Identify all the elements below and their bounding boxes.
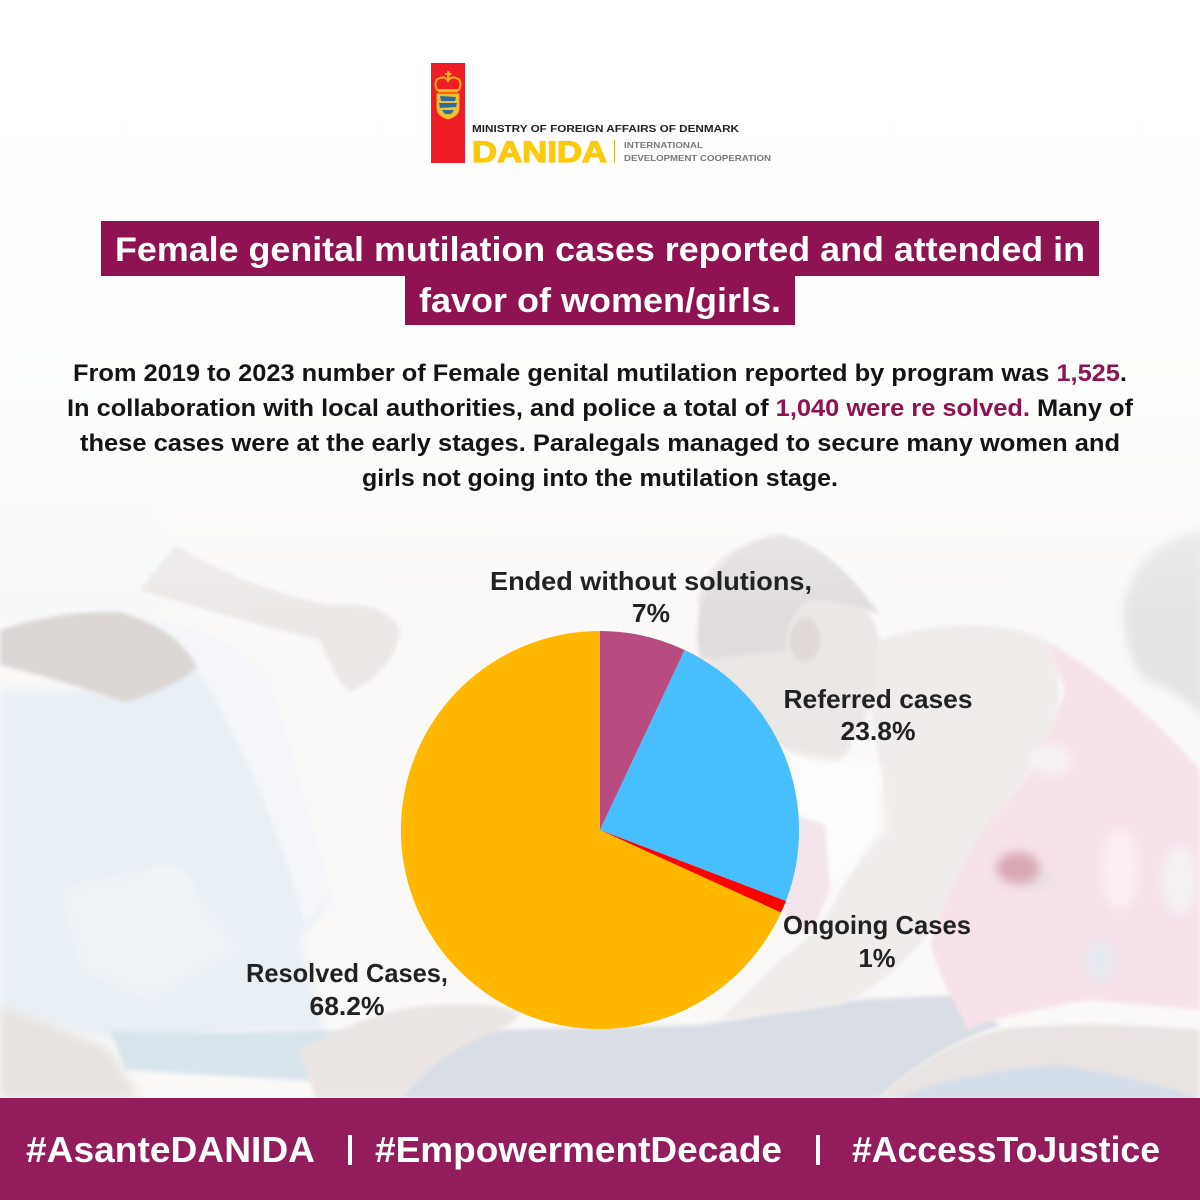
label: ended without solutions: Ended without solutions, xyxy=(490,566,812,596)
slice: ongoing cases 1% xyxy=(600,830,786,912)
logo subtitle: INTERNATIONAL xyxy=(624,140,703,150)
title xyxy=(101,221,1099,325)
intro text block: From 2019 to 2023 number of Female genital mutilation reported by program was 1,525. xyxy=(73,360,1127,387)
footer hashtag band: #AccessToJustice xyxy=(852,1129,1160,1170)
footer hashtag band: #AsanteDANIDA xyxy=(26,1129,315,1170)
slice: resolved cases 68.2% xyxy=(401,631,781,1029)
title: favor of women/girls. xyxy=(419,282,781,320)
logo red banner xyxy=(431,63,465,163)
logo: Danida, Ministry of Foreign Affairs of Denmark xyxy=(431,63,771,169)
intro text block: In collaboration with local authorities, and police a total of 1,040 were re solved. Many of xyxy=(67,395,1134,422)
label: ongoing cases xyxy=(783,910,971,973)
logo crest: crown and shield xyxy=(436,71,460,119)
label: ended without solutions xyxy=(490,566,812,628)
label: resolved cases xyxy=(246,958,448,1021)
footer hashtag band: #EmpowermentDecade xyxy=(375,1129,782,1170)
logo ministry line: MINISTRY OF FOREIGN AFFAIRS OF DENMARK xyxy=(472,123,739,135)
label: referred cases: 23.8% xyxy=(840,716,916,746)
intro text block: these cases were at the early stages. Paralegals managed to secure many women and xyxy=(80,430,1120,457)
slice: referred cases 23.8% xyxy=(600,650,799,901)
label: resolved cases: Resolved Cases, xyxy=(246,958,448,988)
label: ongoing cases: Ongoing Cases xyxy=(783,910,971,940)
label: ongoing cases: 1% xyxy=(858,943,896,973)
label: referred cases xyxy=(784,684,972,746)
logo wordmark: DANIDA xyxy=(472,136,607,169)
label: referred cases: Referred cases xyxy=(784,684,972,714)
title: Female genital mutilation cases reported and attended in xyxy=(115,231,1085,269)
intro text block: girls not going into the mutilation stage. xyxy=(362,465,838,492)
label: ended without solutions: 7% xyxy=(632,598,670,628)
pie chart xyxy=(401,631,799,1029)
logo: Danida, Ministry of Foreign Affairs of Denmark: DEVELOPMENT COOPERATION xyxy=(624,153,771,163)
slice: ended without solutions 7% xyxy=(600,631,685,830)
intro text block xyxy=(67,360,1134,492)
label: resolved cases: 68.2% xyxy=(310,991,384,1021)
footer hashtag band xyxy=(0,1098,1200,1200)
